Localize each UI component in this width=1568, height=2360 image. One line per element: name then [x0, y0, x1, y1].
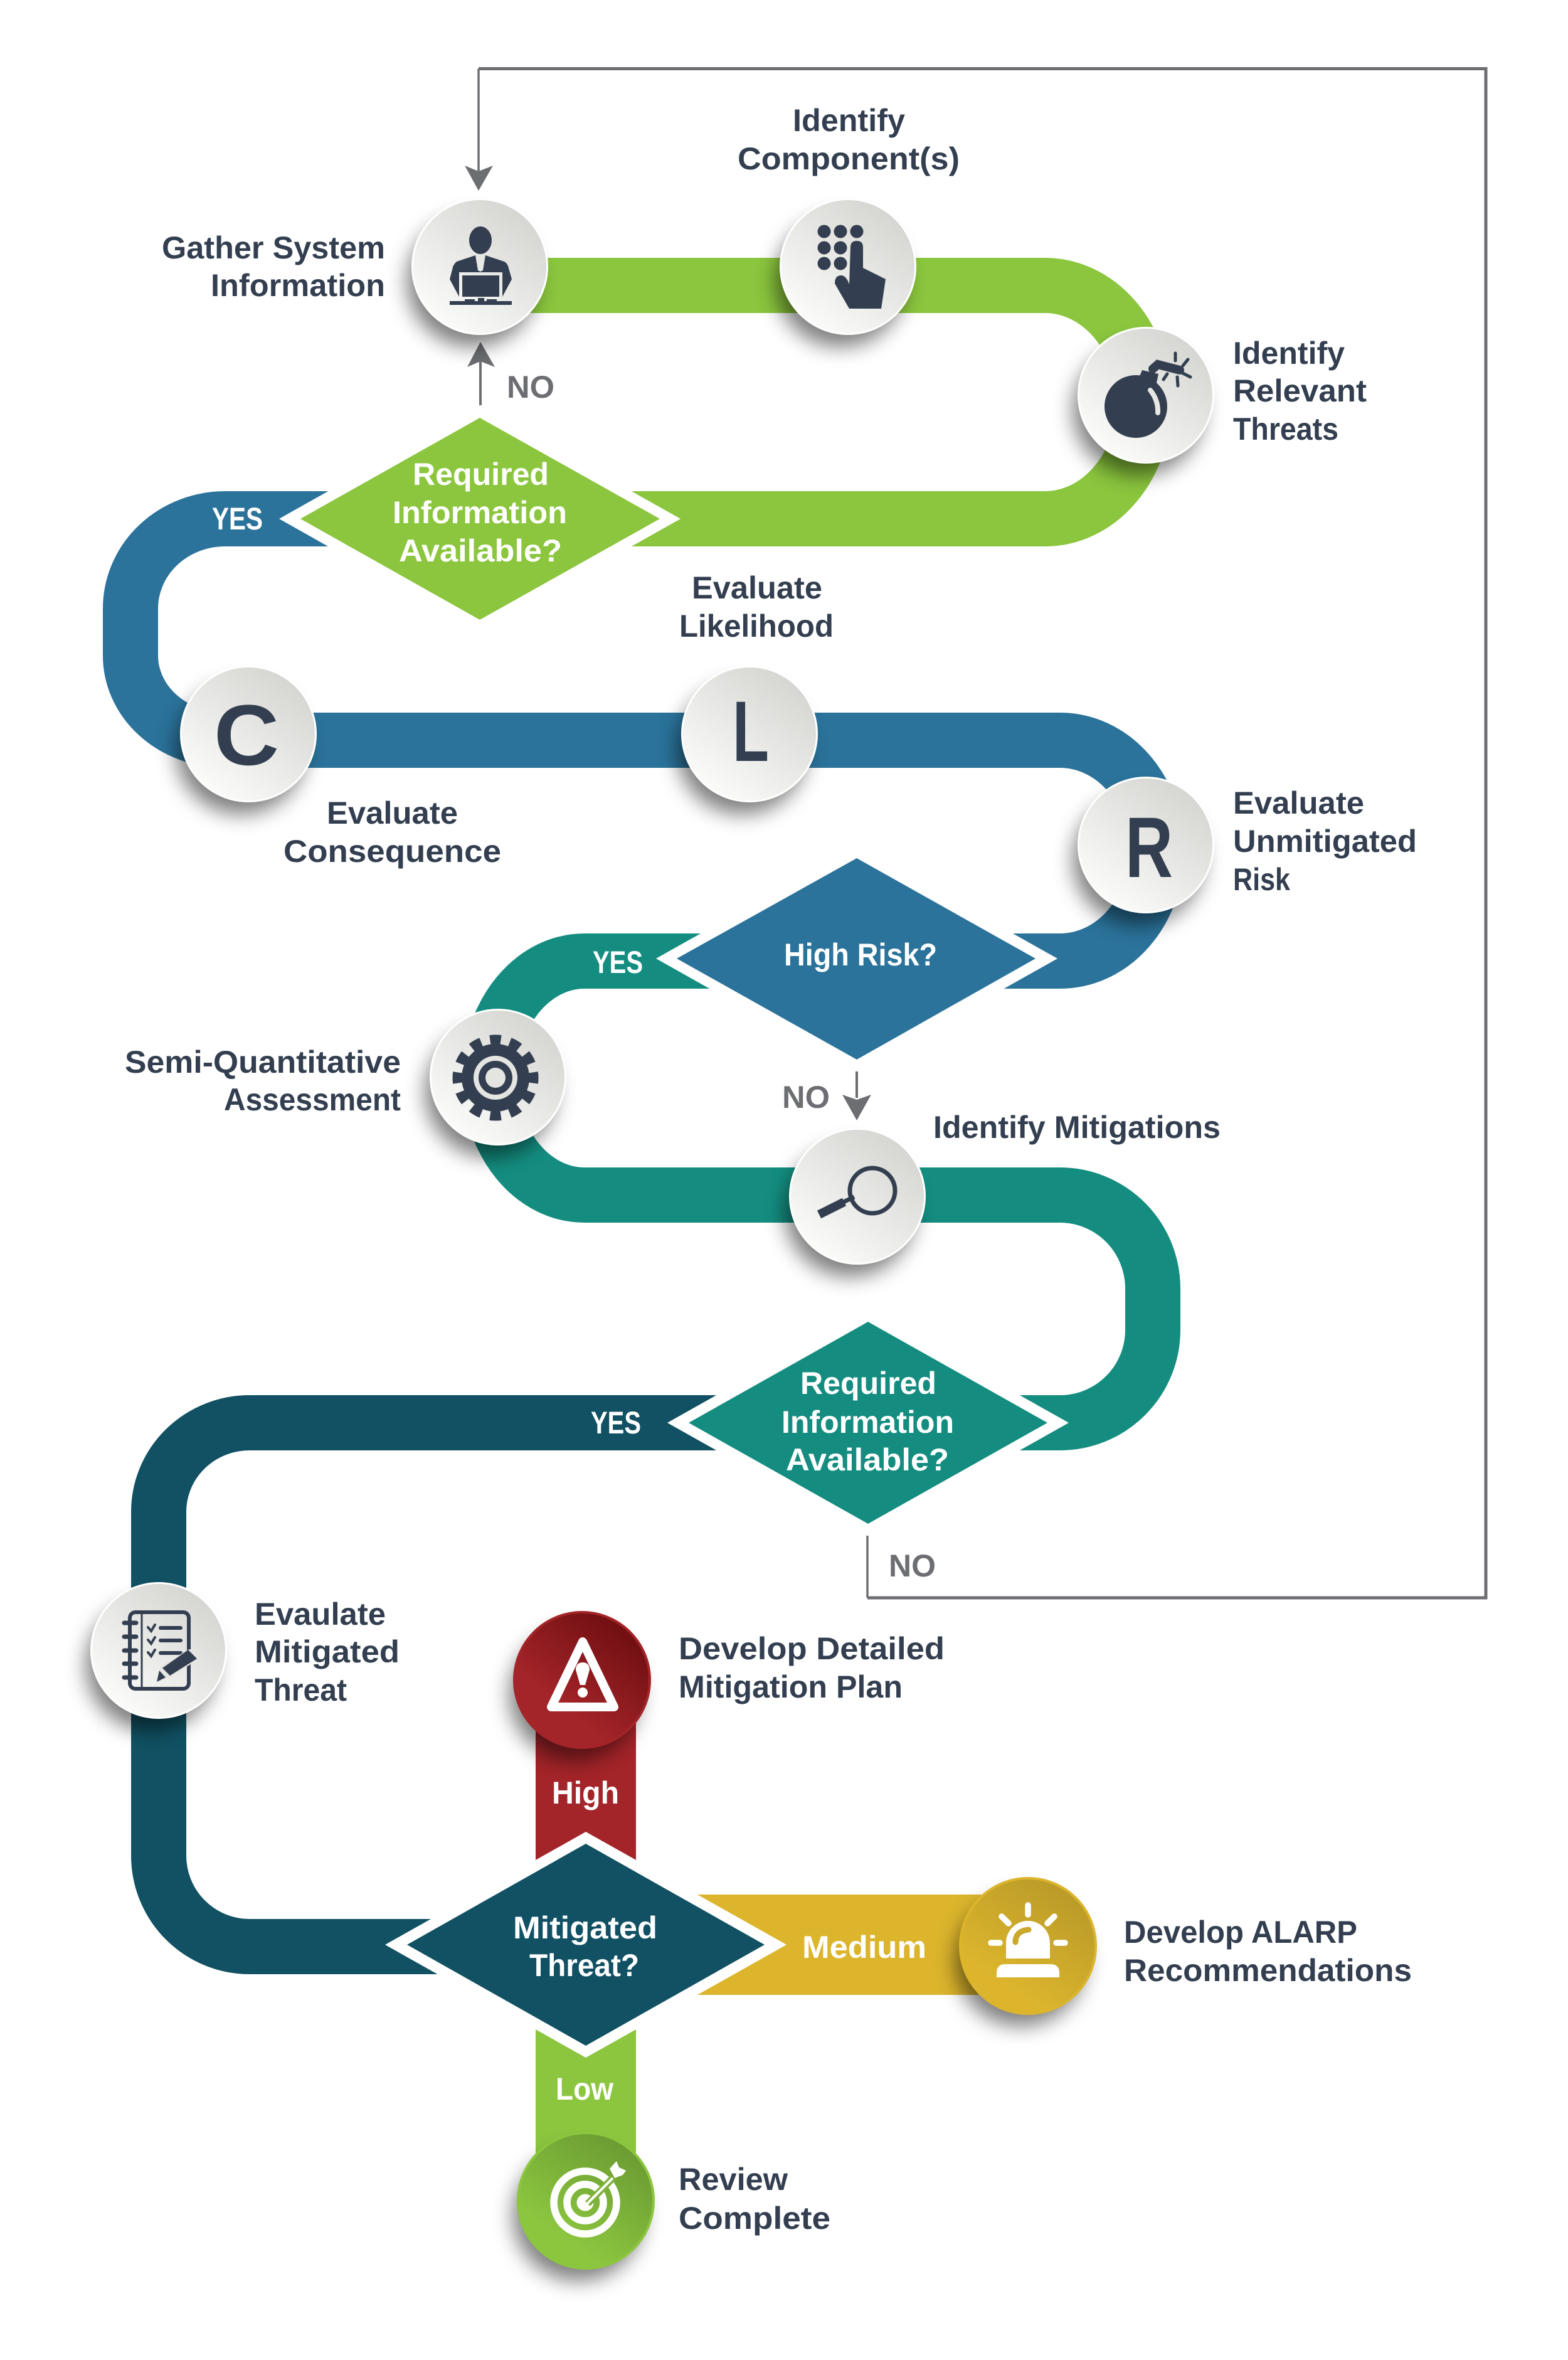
- label: evaluate unmitigated risk: Unmitigated: [1233, 824, 1417, 859]
- node: evaluate likelihood: L: [733, 684, 769, 780]
- label: evaluate mitigated threat: [255, 1597, 400, 1708]
- decision: required information teal: Available?: [786, 1442, 949, 1477]
- node: identify components: [775, 198, 916, 347]
- label: develop detailed mitigation plan: Mitigation Plan: [679, 1669, 903, 1704]
- icon: magnifier: [819, 1168, 895, 1215]
- label: develop detailed mitigation plan: [679, 1631, 945, 1704]
- arrow: feedback into gather system: [465, 166, 493, 191]
- icon: target and arrow: [554, 2161, 626, 2234]
- decision: high risk: [656, 846, 1057, 1071]
- icon: person at laptop: [450, 226, 512, 305]
- label: evaluate consequence: Consequence: [283, 834, 501, 869]
- label: review complete: Review: [679, 2162, 788, 2197]
- label: develop detailed mitigation plan: Develop Detailed: [679, 1631, 945, 1666]
- node: identify relevant threats: [1073, 327, 1214, 476]
- node: evaluate consequence: [176, 666, 317, 814]
- node: identify mitigations: [785, 1128, 926, 1277]
- label: develop alarp recommendations: Develop ALARP: [1124, 1915, 1357, 1950]
- track: high: [536, 1681, 636, 1882]
- label: semi-quantitative assessment: Semi-Quantitative: [125, 1044, 401, 1080]
- label: evaluate consequence: Evaluate: [327, 795, 458, 831]
- label: evaluate mitigated threat: Threat: [255, 1672, 347, 1708]
- label: evaluate mitigated threat: Evaulate: [255, 1597, 386, 1632]
- icon: hand on keypad: [818, 225, 886, 309]
- icon: bomb: [1104, 353, 1190, 438]
- track: green: [480, 285, 1144, 519]
- label: gather system information: [162, 230, 385, 303]
- arrow: no down: [842, 1071, 871, 1120]
- label: gather system information: Information: [211, 268, 385, 303]
- label: identify relevant threats: [1233, 336, 1367, 447]
- label: identify relevant threats: Relevant: [1233, 373, 1367, 408]
- node: evaluate consequence: C: [214, 688, 279, 784]
- node: review complete: [513, 2132, 655, 2281]
- decision: required information green: Information: [393, 495, 567, 530]
- decision: required information teal: Required: [800, 1366, 936, 1401]
- node: develop alarp recommendations: [955, 1877, 1097, 2026]
- label: evaluate likelihood: [679, 570, 834, 644]
- label: yes on blue: YES: [212, 501, 263, 536]
- label: evaluate unmitigated risk: Risk: [1233, 862, 1290, 897]
- decision: required information green: Required: [413, 457, 549, 492]
- node: evaluate unmitigated risk: R: [1125, 800, 1173, 896]
- node: develop detailed mitigation plan: [509, 1611, 651, 1760]
- decision: mitigated threat: Threat?: [529, 1948, 639, 1983]
- label: evaluate unmitigated risk: Evaluate: [1233, 785, 1364, 821]
- label: evaluate likelihood: Likelihood: [679, 609, 834, 644]
- decision: mitigated threat: Mitigated: [513, 1910, 657, 1945]
- label: identify relevant threats: Threats: [1233, 412, 1338, 447]
- icon: alarm beacon: [991, 1905, 1065, 1977]
- label: develop alarp recommendations: [1124, 1915, 1412, 1988]
- label: low: Low: [556, 2071, 613, 2107]
- label: identify relevant threats: Identify: [1233, 336, 1345, 371]
- decision: required information teal: [667, 1310, 1069, 1536]
- label: identify components: Component(s): [738, 141, 960, 176]
- decision: required information green: [279, 406, 681, 632]
- decision: high risk: High Risk?: [784, 937, 937, 972]
- label: evaluate likelihood: Evaluate: [692, 570, 822, 605]
- icon: checklist and pencil: [124, 1612, 197, 1689]
- node: gather system information: [407, 198, 548, 347]
- label: identify components: Identify: [793, 103, 905, 138]
- track: low: [536, 2007, 636, 2202]
- label: semi-quantitative assessment: Assessment: [224, 1082, 401, 1117]
- label: yes on teal: YES: [593, 945, 643, 980]
- track: blue: [130, 519, 1157, 961]
- track: teal: [490, 961, 1153, 1423]
- decision: required information green: Available?: [399, 533, 562, 568]
- decision: required information teal: Information: [781, 1405, 954, 1440]
- node: semi-quantitative assessment: [425, 1009, 566, 1157]
- node: evaluate unmitigated risk: [1073, 777, 1214, 925]
- node: evaluate mitigated threat: [86, 1582, 227, 1731]
- label: no (loop): NO: [889, 1548, 936, 1583]
- track: medium: [659, 1895, 1028, 1995]
- label: no (down arrow): NO: [782, 1080, 830, 1115]
- label: no (up arrow): NO: [507, 369, 554, 405]
- label: develop alarp recommendations: Recommendations: [1124, 1953, 1412, 1988]
- label: identify mitigations: Identify Mitigations: [933, 1110, 1221, 1145]
- label: high: High: [552, 1775, 619, 1810]
- label: medium: Medium: [802, 1930, 926, 1965]
- arrow: no up: [467, 342, 495, 405]
- label: evaluate unmitigated risk: [1233, 785, 1417, 897]
- label: gather system information: Gather System: [162, 230, 385, 265]
- track: dark teal: [159, 1423, 790, 1947]
- icon: warning triangle: [551, 1642, 614, 1707]
- feedback loop line: [479, 69, 1486, 1598]
- label: identify components: [738, 103, 960, 176]
- label: evaluate mitigated threat: Mitigated: [255, 1634, 400, 1669]
- node: evaluate likelihood: [677, 666, 818, 814]
- label: yes on dark teal: YES: [591, 1405, 641, 1440]
- decision: mitigated threat: [385, 1832, 787, 2058]
- label: review complete: Complete: [679, 2201, 830, 2236]
- label: semi-quantitative assessment: [125, 1044, 401, 1117]
- label: review complete: [679, 2162, 830, 2236]
- icon: gear: [458, 1040, 533, 1115]
- label: evaluate consequence: [283, 795, 501, 869]
